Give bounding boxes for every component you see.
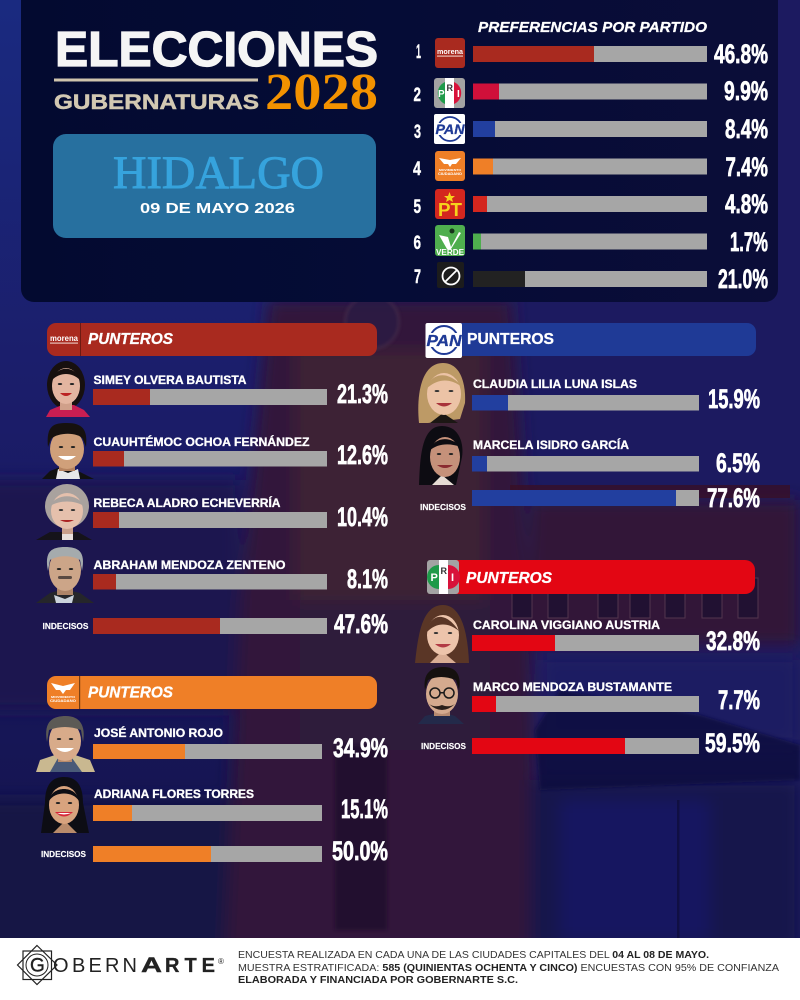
undecided: PRI: 59.5%: [705, 728, 760, 758]
row 3 PAN: 8.4%: [725, 114, 768, 144]
title: ELECCIONES: [55, 23, 378, 77]
row 6 verde: [414, 225, 768, 257]
row 3 PAN: 3: [414, 122, 421, 143]
candidate: Claudia Lilia Luna Islas: 15.9%: [708, 384, 760, 414]
candidate: Simey Olvera Bautista: [46, 361, 388, 417]
logo: Gobernarte: RTE: [165, 955, 215, 977]
logo: Gobernarte: G: [30, 956, 45, 976]
row 3 PAN: [414, 114, 768, 144]
row 1 morena: morena: [437, 47, 464, 56]
candidate: Simey Olvera Bautista: SIMEY OLVERA BAUTISTA: [94, 375, 246, 387]
row 1 morena: 1: [416, 42, 421, 63]
panel: morena: [36, 323, 388, 639]
row 2 PRI: 2: [414, 85, 421, 106]
candidate: Cuauhtémoc Ochoa Fernández: [42, 423, 388, 479]
PAN header: PAN: [426, 333, 462, 350]
row 5 PT: PT: [438, 200, 462, 220]
survey note: [238, 949, 779, 986]
candidate: Carolina Viggiano Austria: CAROLINA VIGGIANO AUSTRIA: [473, 620, 660, 632]
candidate: Rebeca Aladro Echeverría: REBECA ALADRO ECHEVERRÍA: [94, 497, 280, 510]
row 1 morena: 46.8%: [714, 39, 768, 69]
undecided: PRI: [421, 728, 760, 758]
PRI header: R: [440, 566, 448, 576]
candidate: Cuauhtémoc Ochoa Fernández: 12.6%: [337, 440, 388, 470]
row 7 no party: [414, 262, 768, 294]
row 5 PT: [414, 189, 768, 220]
row 2 PRI: I: [457, 89, 460, 100]
footer: [0, 938, 800, 1000]
candidate: Abraham Mendoza Zenteno: 8.1%: [347, 564, 388, 594]
row 4 movimiento ciudadano: [413, 151, 768, 182]
movimiento ciudadano header: [47, 676, 377, 709]
candidate: Abraham Mendoza Zenteno: [36, 547, 388, 603]
candidate: José Antonio Rojo: [36, 716, 388, 772]
survey note: ELABORADA Y FINANCIADA POR GOBERNARTE S.C.: [238, 974, 518, 986]
movimiento ciudadano header: PUNTEROS: [88, 684, 174, 702]
title: 2028: [265, 64, 378, 121]
title: [54, 23, 378, 121]
candidate: Marcela Isidro García: MARCELA ISIDRO GARCÍA: [473, 439, 629, 452]
undecided: morena: 47.6%: [334, 609, 388, 639]
undecided: movimiento ciudadano: [41, 836, 388, 866]
row 6 verde: VERDE: [436, 248, 465, 257]
candidate: Carolina Viggiano Austria: [415, 605, 760, 663]
PAN header: [426, 323, 756, 358]
candidate: Marcela Isidro García: [419, 426, 760, 485]
row 2 PRI: 9.9%: [724, 76, 768, 106]
row 4 movimiento ciudadano: CIUDADANO: [438, 172, 462, 176]
candidate: Claudia Lilia Luna Islas: [418, 363, 760, 423]
undecided: PAN: [420, 483, 760, 513]
logo: Gobernarte: O: [53, 955, 69, 977]
row 6 verde: 6: [414, 233, 421, 254]
panel: PAN: [418, 323, 760, 513]
row 2 PRI: P: [438, 89, 445, 100]
survey note: MUESTRA ESTRATIFICADA: 585 (QUINIENTAS OCHENTA Y CINCO) ENCUESTAS CON 95% DE CONFIANZA: [238, 962, 779, 974]
morena header: PUNTEROS: [88, 331, 174, 348]
candidate: Rebeca Aladro Echeverría: [36, 484, 388, 540]
heading: preferencias por partido: PREFERENCIAS POR PARTIDO: [478, 19, 707, 36]
candidate: Adriana Flores Torres: ADRIANA FLORES TORRES: [94, 789, 254, 801]
candidate: Rebeca Aladro Echeverría: 10.4%: [337, 502, 388, 532]
row 7 no party: 21.0%: [718, 264, 768, 294]
dark shape at lower right: [535, 690, 800, 790]
title: GUBERNATURAS: [54, 91, 259, 114]
movimiento ciudadano header: CIUDADANO: [50, 699, 76, 703]
candidate: Marco Mendoza Bustamante: MARCO MENDOZA BUSTAMANTE: [473, 682, 672, 694]
candidate: Marco Mendoza Bustamante: 7.7%: [718, 685, 760, 715]
candidate: Claudia Lilia Luna Islas: CLAUDIA LILIA LUNA ISLAS: [473, 379, 637, 391]
row 1 morena: [416, 38, 768, 69]
panel: movimiento ciudadano: [36, 676, 388, 866]
movimiento ciudadano header: MOVIMIENTO: [51, 695, 76, 699]
row 4 movimiento ciudadano: MOVIMIENTO: [439, 168, 462, 172]
candidate: Marcela Isidro García: 6.5%: [716, 448, 760, 478]
state and date box: [53, 134, 376, 238]
row 6 verde: 1.7%: [730, 227, 768, 257]
PRI header: PUNTEROS: [466, 570, 553, 587]
party preference chart: [413, 38, 768, 294]
row 4 movimiento ciudadano: 7.4%: [726, 152, 768, 182]
candidate: Adriana Flores Torres: 15.1%: [341, 794, 388, 824]
logo: Gobernarte: [18, 946, 224, 984]
state and date box: HIDALGO: [113, 147, 324, 199]
top dark panel: [21, 0, 778, 302]
row 7 no party: 7: [414, 267, 421, 288]
hotel windows: [510, 485, 790, 618]
survey note: ENCUESTA REALIZADA EN CADA UNA DE LAS CIUDADES CAPITALES DEL 04 AL 08 DE MAYO.: [238, 949, 709, 961]
candidate: Simey Olvera Bautista: 21.3%: [337, 379, 388, 409]
row 5 PT: 5: [414, 197, 421, 218]
candidate: Cuauhtémoc Ochoa Fernández: CUAUHTÉMOC OCHOA FERNÁNDEZ: [94, 436, 310, 449]
candidate: Marco Mendoza Bustamante: [418, 667, 760, 724]
undecided: movimiento ciudadano: 50.0%: [332, 836, 388, 866]
undecided: PRI: INDECISOS: [421, 741, 466, 751]
candidate: Abraham Mendoza Zenteno: ABRAHAM MENDOZA ZENTENO: [94, 560, 286, 572]
undecided: morena: INDECISOS: [42, 621, 89, 631]
morena header: morena: [50, 334, 79, 343]
clock tower: [335, 295, 399, 930]
row 4 movimiento ciudadano: 4: [413, 159, 421, 180]
undecided: PAN: INDECISOS: [420, 502, 466, 512]
candidate: Carolina Viggiano Austria: 32.8%: [706, 626, 760, 656]
logo: Gobernarte: BERN: [72, 955, 137, 977]
undecided: morena: [42, 609, 388, 639]
candidate: José Antonio Rojo: 34.9%: [333, 733, 388, 763]
PRI header: P: [430, 572, 438, 584]
PRI header: [427, 560, 755, 594]
candidate: Adriana Flores Torres: [41, 777, 388, 833]
candidate: José Antonio Rojo: JOSÉ ANTONIO ROJO: [94, 727, 223, 740]
undecided: PAN: 77.6%: [707, 483, 760, 513]
row 2 PRI: [414, 76, 768, 108]
logo: Gobernarte: A: [141, 954, 162, 977]
row 5 PT: 4.8%: [725, 189, 768, 219]
state and date box: 09 DE MAYO 2026: [140, 200, 295, 217]
row 3 PAN: PAN: [436, 121, 465, 137]
undecided: movimiento ciudadano: INDECISOS: [41, 849, 86, 859]
row 2 PRI: R: [446, 83, 454, 93]
morena header: [47, 323, 377, 356]
PAN header: PUNTEROS: [467, 331, 554, 348]
panel: PRI: [415, 560, 760, 758]
logo: Gobernarte: ®: [218, 957, 224, 966]
PRI header: I: [451, 572, 454, 584]
